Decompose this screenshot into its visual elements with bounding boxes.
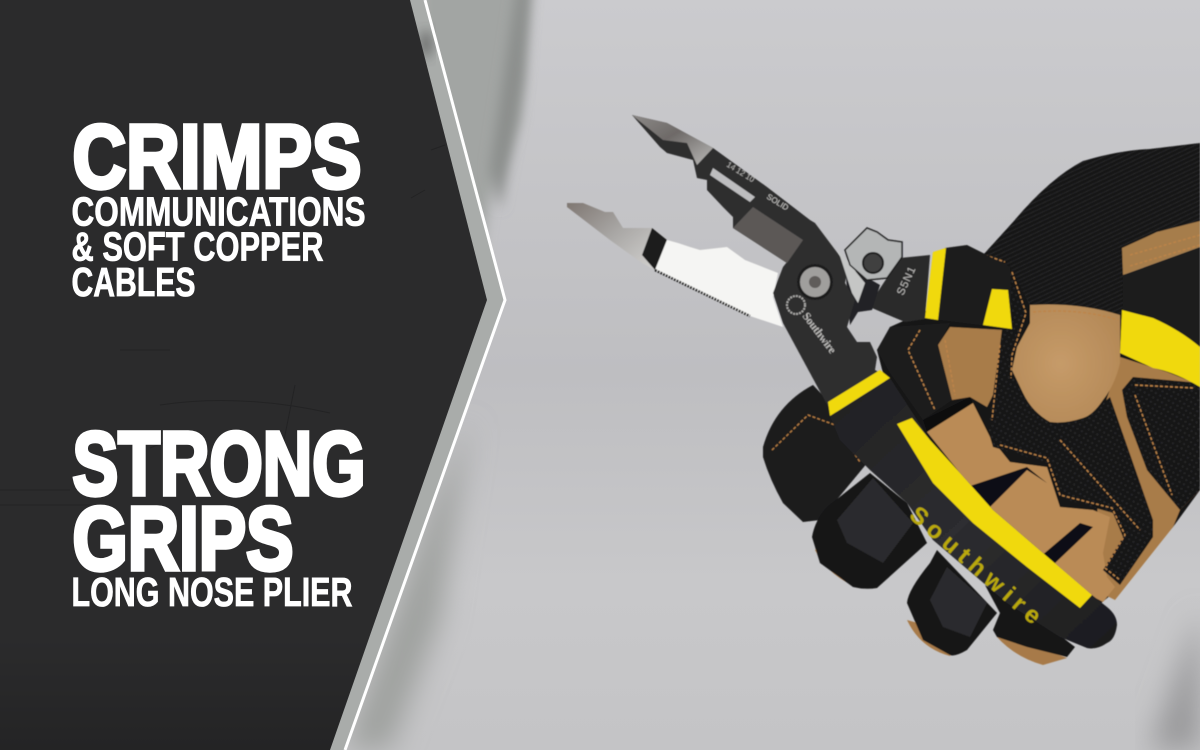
glove: top right black patch bbox=[1123, 247, 1200, 350]
pliers: pivot pin bbox=[797, 264, 833, 300]
glove: right black pad bbox=[1122, 377, 1200, 510]
pliers: rear jaw label: S5N1 bbox=[895, 265, 918, 297]
glove: top right tan patch bbox=[1122, 221, 1200, 275]
pliers: solid label: SOLID bbox=[765, 192, 790, 213]
subheading: LONG NOSE PLIER: LONG NOSE PLIER bbox=[72, 569, 352, 615]
pliers: rear handle yellow bbox=[1120, 310, 1200, 387]
glove: palm tan upper bbox=[938, 327, 1003, 407]
glove: finger two tip bbox=[815, 540, 890, 588]
pliers: brand logo bbox=[787, 296, 805, 314]
shadow patch on gray band bbox=[420, 30, 432, 58]
illustration: gloved hand holding pliers bbox=[567, 115, 1200, 665]
glove: tan lower palm bbox=[927, 403, 1115, 602]
pliers: handle brand: Southwire bbox=[904, 501, 1046, 630]
pliers: upper handle yellow insert bbox=[983, 289, 1012, 329]
glove: finger two bbox=[812, 473, 927, 589]
pliers: lower nose bbox=[567, 203, 667, 270]
glove: finger three bbox=[907, 550, 997, 655]
pliers: upper handle black bbox=[925, 245, 1012, 329]
heading: GRIPS: GRIPS bbox=[72, 490, 294, 590]
glove: index stitching bbox=[772, 415, 860, 462]
pliers: gauge numbers: 14 12 10 bbox=[725, 160, 757, 184]
pliers: lower nose dark edge bbox=[642, 228, 667, 270]
pliers: brand engraving: Southwire bbox=[800, 311, 838, 356]
glove: dark gap under grip bbox=[923, 397, 973, 432]
panel: dark chevron bbox=[0, 0, 487, 750]
pliers: silver nut bbox=[845, 228, 902, 280]
heading: CRIMPS: CRIMPS bbox=[72, 108, 362, 208]
glove: grip patch bbox=[877, 323, 952, 420]
glove: thumb surround bbox=[988, 267, 1153, 585]
pliers: upper jaw silver tip bbox=[632, 115, 713, 165]
pliers: silver spring piece bbox=[838, 250, 865, 303]
pliers: upper jaw wire slot bbox=[710, 168, 755, 202]
glove: dark gap one bbox=[967, 467, 1047, 510]
pliers: ribbed cutter bbox=[733, 207, 803, 263]
heading: STRONG: STRONG bbox=[72, 414, 366, 514]
glove: index finger bbox=[763, 385, 868, 522]
text block: strong grips bbox=[72, 414, 366, 615]
pliers: rear jaw bbox=[872, 255, 930, 322]
pliers: bridge behind nut bbox=[845, 265, 880, 325]
panel: gray chevron band bbox=[328, 0, 505, 750]
glove: hand silhouette base bbox=[877, 255, 1200, 604]
glove: finger three texture bbox=[930, 567, 987, 637]
glove: finger three tip bbox=[907, 620, 960, 656]
pliers: upper handle yellow band bbox=[925, 248, 946, 320]
white chevron outline bbox=[345, 0, 505, 750]
pliers: lower jaw serrated edge bbox=[655, 270, 750, 316]
subheading line: & SOFT COPPER: & SOFT COPPER bbox=[72, 224, 324, 270]
text block: crimps bbox=[72, 108, 366, 305]
pliers: handle yellow stripe bbox=[897, 418, 1092, 608]
subheading line: COMMUNICATIONS: COMMUNICATIONS bbox=[72, 188, 366, 234]
pliers: handle ring bbox=[828, 370, 890, 416]
glove: finger two texture bbox=[837, 478, 913, 563]
glove: stitching bbox=[908, 235, 1200, 580]
glove: finger four tip bbox=[997, 637, 1067, 665]
glove: thumb tan bbox=[1012, 304, 1120, 422]
pliers: white lower jaw bbox=[655, 240, 783, 327]
glove: finger four bbox=[985, 585, 1075, 657]
pliers: lower handle bbox=[830, 378, 1117, 648]
glove: tan right strip bbox=[1095, 357, 1200, 600]
glove: back of hand cuff bbox=[983, 143, 1200, 315]
glove: dark gap two bbox=[1040, 523, 1093, 565]
pliers: upper jaw and head bbox=[632, 115, 890, 410]
subheading line: CABLES: CABLES bbox=[72, 259, 196, 305]
